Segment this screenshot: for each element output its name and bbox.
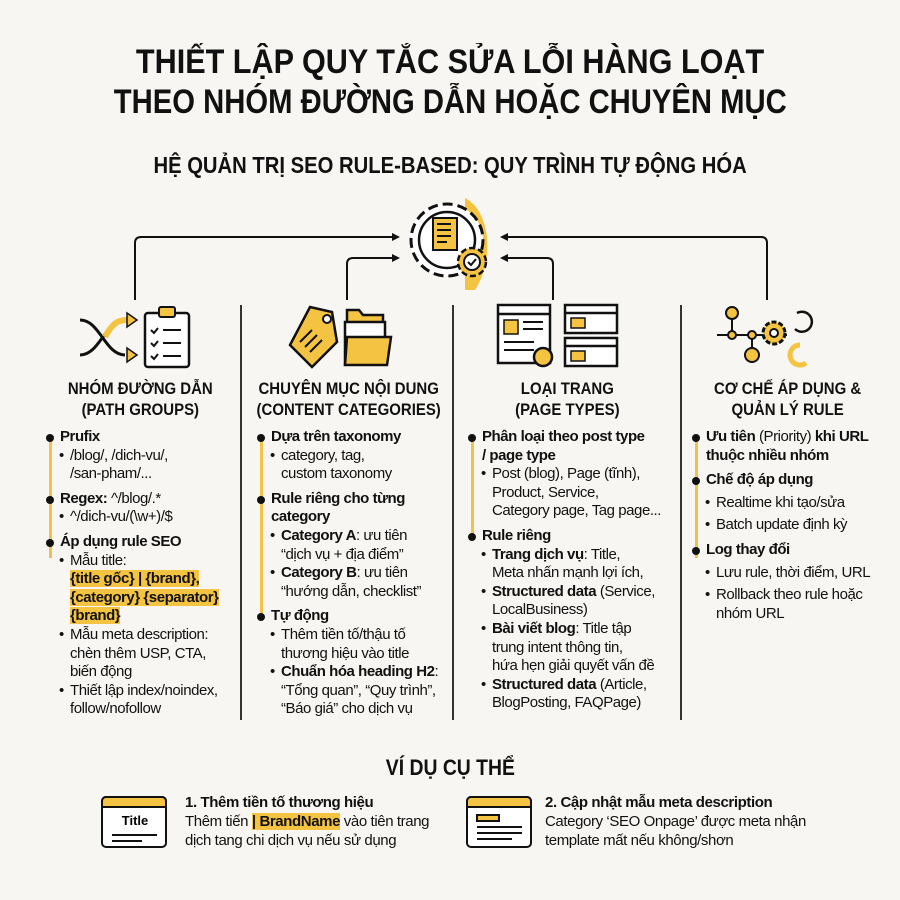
icon: title window xyxy=(101,796,167,848)
panel: rule mechanism list: thuộc nhiều nhóm xyxy=(706,447,829,464)
panel: path groups list: /blog/, /dich-vu/, xyxy=(70,447,168,464)
panel: content categories list: Dựa trên taxonomy xyxy=(271,428,401,445)
panel: rule mechanism list xyxy=(692,428,870,622)
example 2: 2. Cập nhật mẫu meta description xyxy=(545,794,772,811)
icon: tag + folders xyxy=(288,306,392,369)
panel: content categories list: “Báo giá” cho dịch vụ xyxy=(281,700,412,717)
example 1: dịch tang chi dịch vụ nếu sử dụng xyxy=(185,832,396,849)
heading: content categories: CHUYÊN MỤC NỘI DUNG xyxy=(259,379,439,398)
panel: content categories list: “dịch vụ + địa điểm” xyxy=(281,546,403,563)
panel: page types list: Phân loại theo post type xyxy=(482,428,645,445)
heading: page types xyxy=(515,379,620,419)
panel: content categories list xyxy=(257,428,438,717)
panel: rule mechanism list: Lưu rule, thời điểm, URL xyxy=(716,564,870,581)
icon: shuffle + clipboard xyxy=(80,306,190,368)
heading: rule mechanism: QUẢN LÝ RULE xyxy=(732,400,844,419)
icon: title window: Title xyxy=(122,813,148,828)
panel: path groups list: {title gốc} | {brand}, xyxy=(70,570,199,587)
panel: page types list: Structured data (Article, xyxy=(492,676,647,693)
heading: content categories xyxy=(257,379,441,419)
panel: content categories list: Category B: ưu tiên xyxy=(281,564,408,581)
panel: page types list: Product, Service, xyxy=(492,484,599,501)
heading: examples: VÍ DỤ CỤ THỂ xyxy=(385,755,515,780)
panel: page types list: Meta nhấn mạnh lợi ích, xyxy=(492,564,643,581)
panel: content categories list: Rule riêng cho từng xyxy=(271,490,405,507)
panel: page types list xyxy=(468,428,661,711)
panel: path groups list: Áp dụng rule SEO xyxy=(60,533,181,550)
title xyxy=(114,43,786,121)
panel: content categories list: custom taxonomy xyxy=(281,465,392,482)
panel: path groups list: /san-pham/... xyxy=(70,465,152,482)
panel: path groups list: {brand} xyxy=(70,607,120,624)
arrows: to central gear xyxy=(134,233,768,300)
example 1: Thêm tiến | BrandName vào tiên trang xyxy=(185,813,429,830)
panel: content categories list: Chuẩn hóa heading H2: xyxy=(281,663,438,680)
panel: rule mechanism list: Realtime khi tạo/sửa xyxy=(716,494,845,511)
panel: page types list: Structured data (Service, xyxy=(492,583,655,600)
panel: path groups list: {category} {separator} xyxy=(70,589,219,606)
heading: path groups xyxy=(68,379,212,419)
panel: content categories list: thương hiệu vào title xyxy=(281,645,409,662)
panel: page types list: trung intent thông tin, xyxy=(492,639,623,656)
heading: content categories: (CONTENT CATEGORIES) xyxy=(257,400,441,419)
example 2: template mất nếu không/shơn xyxy=(545,832,733,849)
title: THIẾT LẬP QUY TẮC SỬA LỖI HÀNG LOẠT xyxy=(136,43,764,81)
heading: path groups: (PATH GROUPS) xyxy=(81,400,199,419)
panel: page types list: Post (blog), Page (tĩnh), xyxy=(492,465,640,482)
heading: rule mechanism: CƠ CHẾ ÁP DỤNG & xyxy=(714,379,862,398)
panel: page types list: LocalBusiness) xyxy=(492,601,587,618)
subtitle: HỆ QUẢN TRỊ SEO RULE-BASED: QUY TRÌNH TỰ ĐỘNG HÓA xyxy=(153,152,747,178)
panel: rule mechanism list: nhóm URL xyxy=(716,605,784,622)
panel: path groups list: Regex: ^/blog/.* xyxy=(60,490,161,507)
panel: path groups list: Prufix xyxy=(60,428,100,445)
heading: page types: (PAGE TYPES) xyxy=(515,400,620,419)
heading: page types: LOẠI TRANG xyxy=(521,379,614,398)
panel: rule mechanism list: Rollback theo rule hoặc xyxy=(716,586,862,603)
panel: path groups list: Mẫu title: xyxy=(70,552,126,569)
example 1: 1. Thêm tiền tố thương hiệu xyxy=(185,794,373,811)
panel: content categories list: Tự động xyxy=(271,607,329,624)
panel: page types list: / page type xyxy=(482,447,555,464)
panel: page types list: Rule riêng xyxy=(482,527,551,544)
icon: central gear with checklist xyxy=(410,198,488,290)
icon: page layouts xyxy=(496,304,618,368)
heading: path groups: NHÓM ĐƯỜNG DẪN xyxy=(68,379,212,398)
panel: path groups list: biến động xyxy=(70,663,132,680)
example 1 xyxy=(101,794,429,849)
title: THEO NHÓM ĐƯỜNG DẪN HOẶC CHUYÊN MỤC xyxy=(114,83,786,121)
panel: content categories list: category, tag, xyxy=(281,447,364,464)
example 2: Category ‘SEO Onpage’ được meta nhận xyxy=(545,813,806,830)
panel: page types list: hứa hẹn giải quyết vấn đề xyxy=(492,657,654,674)
panel: rule mechanism list: Batch update định kỳ xyxy=(716,516,847,533)
icon: workflow gear + undo xyxy=(717,306,814,368)
panel: rule mechanism list: Chế độ áp dụng xyxy=(706,471,813,488)
panel: path groups list: Mẫu meta description: xyxy=(70,626,208,643)
example 2 xyxy=(466,794,806,849)
panel: page types list: BlogPosting, FAQPage) xyxy=(492,694,641,711)
panel: content categories list: Thêm tiền tố/thậu tố xyxy=(281,626,405,643)
panel: rule mechanism list: Ưu tiên (Priority) khi URL xyxy=(706,428,868,445)
panel: page types list: Bài viết blog: Title tập xyxy=(492,620,631,637)
heading: rule mechanism xyxy=(714,379,862,419)
panel: path groups list: Thiết lập index/noindex, xyxy=(70,682,218,699)
panel: path groups list xyxy=(46,428,219,717)
panel: rule mechanism list: Log thay đổi xyxy=(706,541,790,558)
panel: content categories list: “hướng dẫn, checklist” xyxy=(281,583,421,600)
panel: path groups list: follow/nofollow xyxy=(70,700,161,717)
panel: page types list: Category page, Tag page... xyxy=(492,502,661,519)
panel: path groups list: chèn thêm USP, CTA, xyxy=(70,645,206,662)
panel: page types list: Trang dịch vụ: Title, xyxy=(492,546,620,563)
icon: meta window xyxy=(466,796,532,848)
panel: path groups list: ^/dich-vu/(\w+)/$ xyxy=(70,508,172,525)
panel: content categories list: “Tổng quan”, “Quy trình”, xyxy=(281,682,436,699)
panel: content categories list: Category A: ưu tiên xyxy=(281,527,407,544)
panel: content categories list: category xyxy=(271,508,330,525)
